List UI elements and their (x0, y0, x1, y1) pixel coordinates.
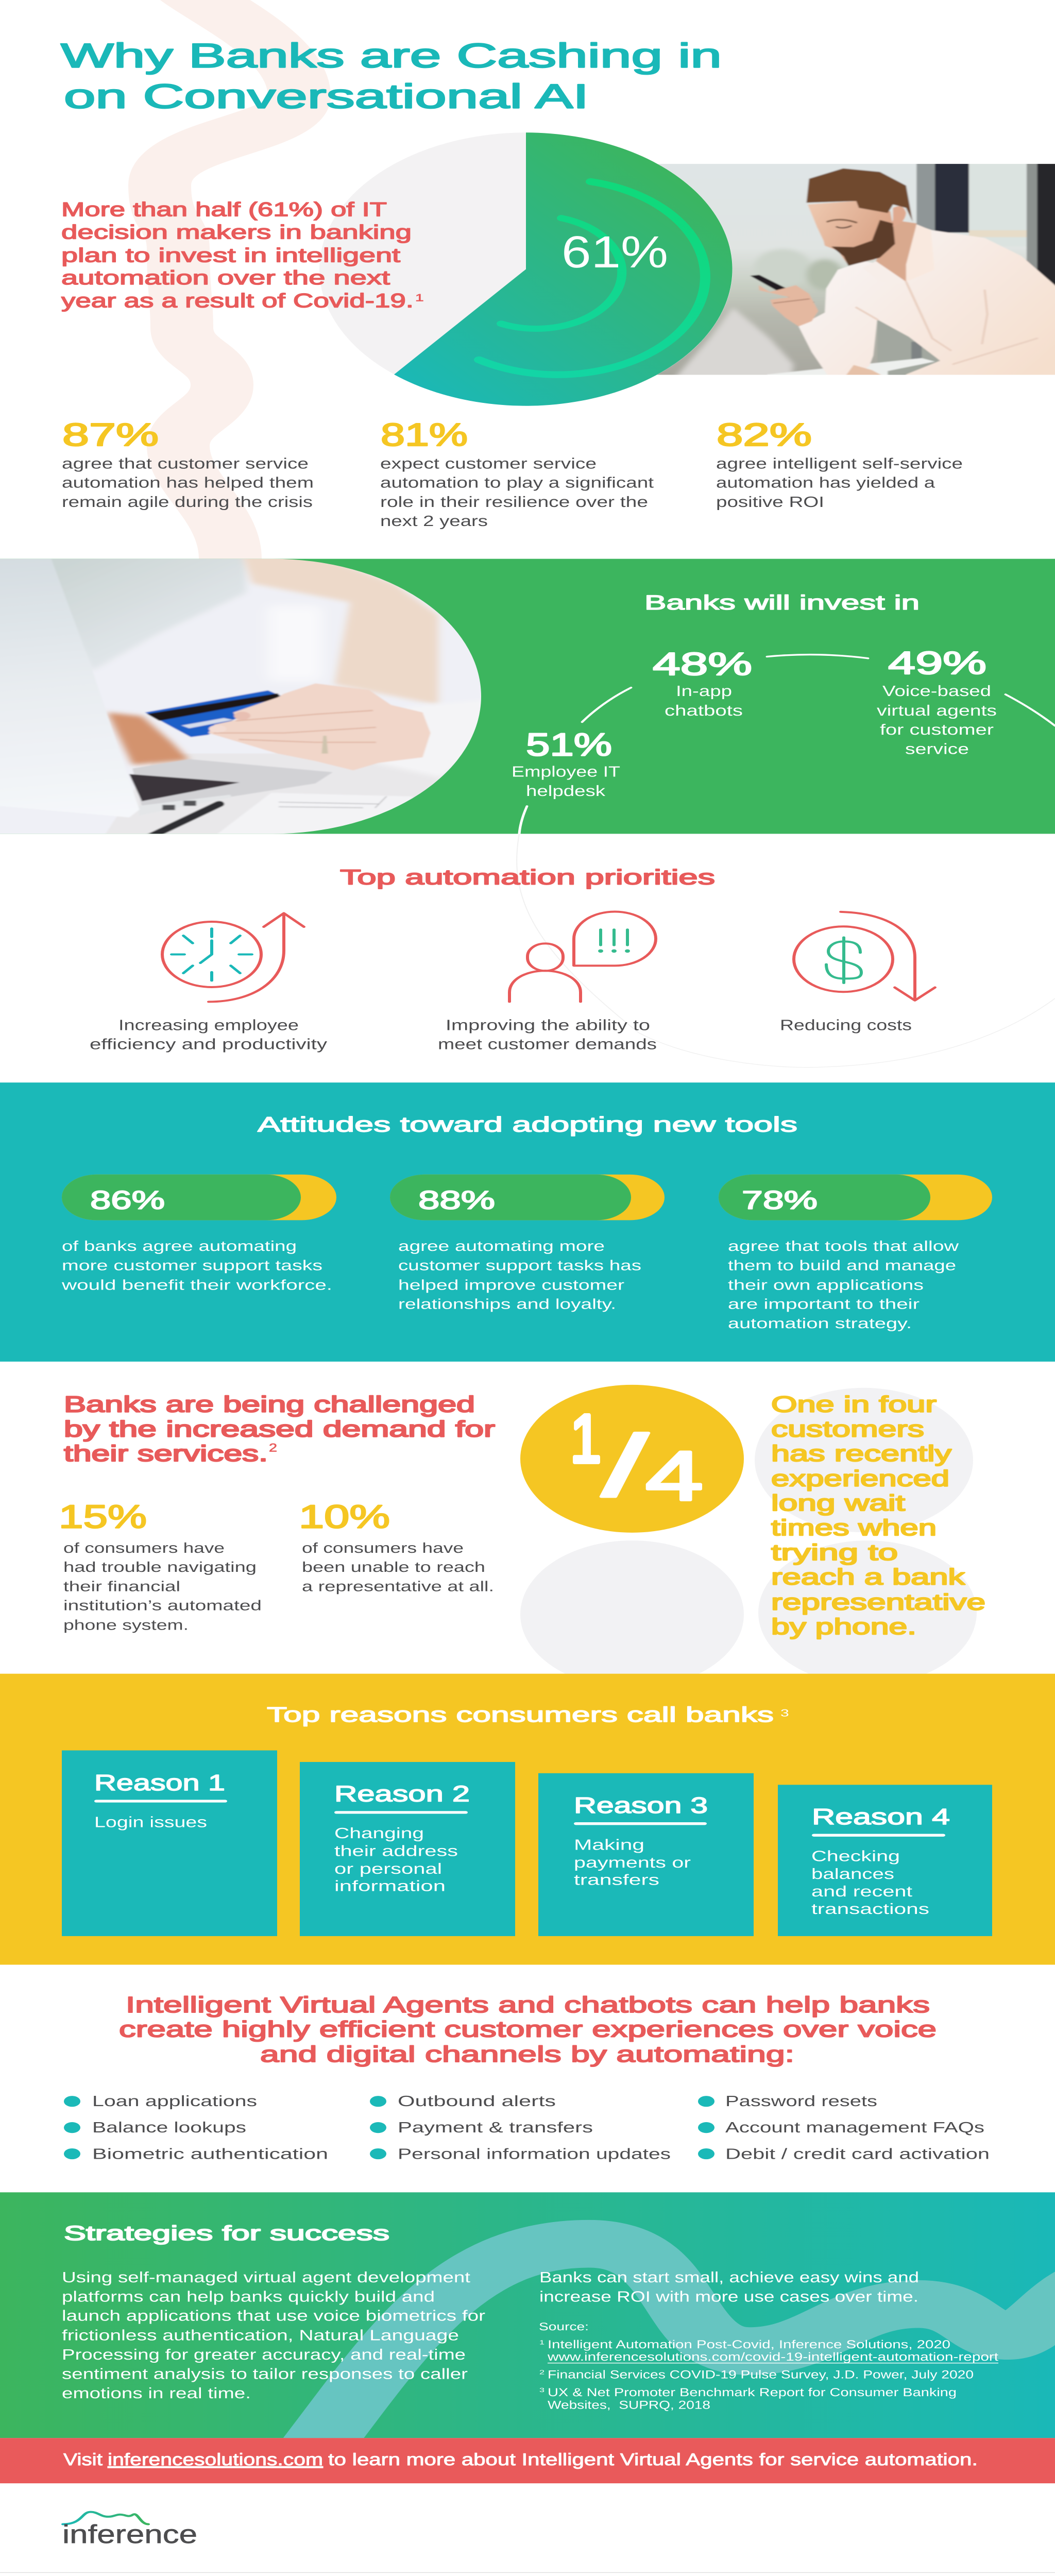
bullet list: column 1 (64, 2093, 328, 2162)
callout: more than half: 1 (415, 292, 424, 303)
stat: 81%: next 2 years (380, 513, 488, 530)
stat: 87%: remain agile during the crisis (62, 494, 313, 511)
sources list: 1 (539, 2339, 544, 2346)
stat: 81%: role in their resilience over the (380, 494, 648, 511)
heading: create highly efficient customer experiences over voice (119, 2016, 937, 2042)
text block: right paragraph (539, 2269, 919, 2305)
icon: person with speech bubble (509, 912, 656, 1002)
stat: 51% employee IT helpdesk (512, 726, 620, 800)
card: reason 3: payments or (574, 1854, 691, 1871)
footer rule (0, 2572, 1055, 2573)
caption: improving ability: meet customer demands (438, 1036, 657, 1053)
card: reason 1: Login issues (94, 1814, 207, 1831)
card: reason 3: Reason 3 (574, 1792, 708, 1818)
stat: 48% in-app chatbots: 48% (653, 646, 752, 682)
stat: 81% (380, 417, 654, 530)
sources list: Websites, SUPRQ, 2018 (548, 2398, 710, 2412)
text block: right paragraph: increase ROI with more use cases over time. (539, 2289, 918, 2305)
heading (64, 1392, 495, 1466)
photo: hand holding credit card at laptop (0, 558, 481, 834)
text: 78% description: their own applications (728, 1277, 924, 1293)
icon: clock with up arrow (162, 913, 304, 1002)
stat: 10%: a representative at all. (302, 1578, 494, 1595)
card: reason 3: Making (574, 1837, 644, 1853)
stat: 48% in-app chatbots (653, 646, 752, 719)
stat: 49% voice-based virtual agents: Voice-based (882, 683, 991, 700)
stat: 15%: institution’s automated (63, 1598, 262, 1614)
caption: increasing employee efficiency: efficiency and productivity (90, 1036, 327, 1053)
text: 78% description: are important to their (728, 1296, 920, 1312)
callout: one in four customers: by phone. (771, 1614, 916, 1639)
callout: more than half: automation over the next (61, 267, 390, 289)
callout: more than half: decision makers in banking (61, 221, 412, 243)
panel: banks are being challenged (59, 1385, 985, 1688)
stat: 15%: their financial (63, 1578, 180, 1595)
stat: 87%: 87% (62, 417, 159, 452)
card: reason 4: and recent (811, 1883, 912, 1900)
text: 78% description: agree that tools that allow (728, 1238, 959, 1254)
bullet list: column 3 (698, 2093, 990, 2162)
faint circle outline (517, 834, 1055, 1067)
green background (0, 559, 1055, 834)
heading (119, 1992, 937, 2066)
pill: 78%: 78% (742, 1186, 818, 1215)
stat: 82% (716, 417, 963, 511)
stat: 51% employee IT helpdesk: helpdesk (526, 783, 606, 800)
text block: left paragraph: emotions in real time. (62, 2385, 251, 2401)
callout: one in four customers: experienced (771, 1466, 949, 1491)
card: reason 3 (538, 1773, 754, 1936)
card: reason 4: Reason 4 (812, 1804, 950, 1829)
bullet list: column 1: Balance lookups (92, 2119, 246, 2136)
bullet list: column 2: Outbound alerts (398, 2093, 556, 2110)
text: 88% description: helped improve customer (398, 1277, 624, 1293)
callout: one in four customers: representative (771, 1589, 985, 1615)
text: 86% description (61, 1238, 332, 1293)
bullet list: column 3: Debit / credit card activation (725, 2146, 990, 2162)
card: reason 2: their address (334, 1843, 458, 1859)
stat: 15%: had trouble navigating (63, 1559, 257, 1575)
stat: 49% voice-based virtual agents: for customer (880, 721, 994, 738)
stat: 49% voice-based virtual agents (877, 645, 997, 757)
connector arcs (519, 655, 1055, 834)
stat: 87%: agree that customer service (62, 455, 309, 472)
donut chart: 61% (319, 132, 733, 406)
heading: their services. (64, 1440, 268, 1466)
sources list: Intelligent Automation Post-Covid, Inference Solutions, 2020 (548, 2338, 950, 2351)
sources list: Financial Services COVID-19 Pulse Survey, J.D. Power, July 2020 (548, 2368, 974, 2381)
callout: one in four customers: long wait (771, 1490, 905, 1515)
text block: left paragraph: launch applications that use voice biometrics for (62, 2308, 485, 2324)
card: reason 4: balances (811, 1866, 894, 1882)
panel: hero section (61, 0, 1055, 559)
card: reason 2: or personal (334, 1860, 442, 1877)
heading: Intelligent Virtual Agents and chatbots can help banks (126, 1992, 930, 2017)
caption: improving ability: Improving the ability to (446, 1017, 650, 1033)
bullet list: column 3: Password resets (725, 2093, 877, 2110)
stat: 87% (62, 417, 314, 511)
teal background (0, 1082, 1055, 1362)
text block: left paragraph (62, 2269, 485, 2401)
text: 78% description (728, 1238, 959, 1331)
heading: Banks will invest in (644, 591, 920, 614)
stat: 82%: agree intelligent self-service (716, 455, 963, 472)
card: reason 1 (62, 1750, 277, 1936)
caption: increasing employee efficiency: Increasing employee (118, 1017, 299, 1033)
text: 86% description: of banks agree automating (62, 1238, 297, 1254)
stat: 48% in-app chatbots: chatbots (665, 702, 743, 719)
stat: 49% voice-based virtual agents: virtual agents (877, 702, 997, 719)
pill: 86% (62, 1175, 336, 1220)
text block: left paragraph: platforms can help banks quickly build and (62, 2289, 435, 2305)
bullet list: column 2: Payment & transfers (398, 2119, 593, 2136)
panel: attitudes toward adopting new tools (0, 1082, 1055, 1362)
callout: more than half: More than half (61%) of IT (61, 198, 387, 221)
stat: 82%: 82% (717, 417, 812, 452)
stat: 15% (59, 1499, 262, 1633)
card: reason 2 (300, 1762, 515, 1936)
text: 88% description (398, 1238, 641, 1312)
stat: 10%: 10% (299, 1499, 390, 1535)
text block: left paragraph: sentiment analysis to tailor responses to caller (62, 2366, 468, 2382)
callout: one in four customers (771, 1392, 985, 1639)
icon: dollar coin with down arrow (794, 912, 935, 1001)
banner: visit inferencesolutions.com: Visit (63, 2450, 103, 2469)
logo: inference (62, 2512, 197, 2549)
caption: improving ability (438, 1017, 657, 1053)
heading: 3 (780, 1707, 789, 1719)
heading: Banks are being challenged (64, 1392, 475, 1417)
sources list: 2 (539, 2369, 544, 2376)
pale wave background (160, 0, 299, 559)
bullet list: column 2: Personal information updates (398, 2146, 671, 2162)
text: 88% description: relationships and loyalty. (398, 1296, 616, 1312)
stat: 10% (299, 1499, 494, 1595)
bullet list: column 1: Loan applications (92, 2093, 257, 2110)
bullet list: column 1: Biometric authentication (92, 2146, 328, 2162)
bullet list: column 2 (370, 2093, 671, 2162)
card: reason 2: Changing (334, 1825, 424, 1842)
callout: more than half: year as a result of Covid-19. (61, 290, 414, 312)
pill: 78% (719, 1175, 992, 1220)
stat: 15%: phone system. (63, 1617, 189, 1633)
stat: 15%: 15% (59, 1499, 147, 1535)
gradient background (0, 2192, 1055, 2438)
heading: Attitudes toward adopting new tools (258, 1113, 797, 1137)
stat: 82%: automation has yielded a (716, 474, 935, 491)
text: 86% description: more customer support tasks (62, 1257, 322, 1274)
callout: more than half (61, 198, 424, 312)
card: reason 2: information (334, 1878, 446, 1894)
heading: and digital channels by automating: (260, 2041, 794, 2066)
panel: intelligent virtual agents (64, 1992, 990, 2162)
panel: top reasons consumers call banks (0, 1674, 1055, 1964)
panel: strategies for success (0, 2192, 1055, 2464)
stat: 15%: of consumers have (63, 1540, 225, 1556)
callout: one in four customers: One in four (771, 1392, 937, 1417)
stat: 49% voice-based virtual agents: 49% (888, 645, 986, 681)
card: reason 4: transactions (811, 1901, 929, 1918)
callout: one in four customers: times when (771, 1515, 937, 1540)
logo: inference: inference (62, 2520, 197, 2549)
title: on Conversational AI (64, 77, 589, 115)
stat: 48% in-app chatbots: In-app (676, 683, 732, 700)
donut chart: 61%: 61% (561, 227, 668, 277)
panel: top automation priorities (90, 834, 1055, 1067)
stat: 51% employee IT helpdesk: 51% (526, 726, 612, 762)
stat: 49% voice-based virtual agents: service (905, 741, 969, 757)
callout: one in four customers: reach a bank (771, 1564, 965, 1589)
pill: 88% (390, 1175, 665, 1220)
heading: by the increased demand for (64, 1416, 495, 1442)
text block: right paragraph: Banks can start small, achieve easy wins and (539, 2269, 919, 2286)
stat: 10%: been unable to reach (302, 1559, 485, 1575)
banner: visit inferencesolutions.com (0, 2438, 1055, 2483)
sources list: 3 (539, 2386, 544, 2394)
decorative grey circles (520, 1388, 977, 1688)
one quarter badge: 4 (645, 1437, 703, 1515)
stat: 81%: 81% (381, 417, 468, 452)
callout: one in four customers: has recently (771, 1440, 951, 1466)
one quarter badge: / (602, 1417, 648, 1515)
one quarter badge: 1 (570, 1401, 601, 1477)
heading: Strategies for success (64, 2222, 389, 2244)
caption: increasing employee efficiency (90, 1017, 327, 1053)
callout: one in four customers: customers (771, 1416, 924, 1442)
stat: 51% employee IT helpdesk: Employee IT (512, 763, 620, 780)
sources list (539, 2320, 998, 2412)
card: reason 3: transfers (574, 1872, 659, 1888)
yellow background (0, 1674, 1055, 1964)
text: 88% description: agree automating more (398, 1238, 605, 1254)
sources list: UX & Net Promoter Benchmark Report for Consumer Banking (548, 2386, 957, 2399)
sources list: Source: (539, 2320, 589, 2333)
card: reason 1: Reason 1 (94, 1770, 225, 1795)
heading: 2 (269, 1442, 277, 1454)
pill: 86%: 86% (90, 1186, 165, 1215)
text: 86% description: would benefit their workforce. (61, 1277, 332, 1293)
text: 78% description: automation strategy. (728, 1315, 912, 1331)
pill: 88%: 88% (418, 1186, 495, 1215)
bullet list: column 3: Account management FAQs (725, 2119, 984, 2136)
stat: 10%: of consumers have (302, 1540, 464, 1556)
title: Why Banks are Cashing in (61, 37, 722, 75)
caption: reducing costs: Reducing costs (780, 1017, 912, 1033)
wave decoration (304, 2244, 1055, 2464)
stat: 87%: automation has helped them (62, 474, 314, 491)
card: reason 2: Reason 2 (334, 1781, 470, 1806)
banner: visit inferencesolutions.com: inferencesolutions.com (108, 2450, 323, 2469)
text block: left paragraph: Using self-managed virtual agent development (62, 2269, 470, 2286)
callout: more than half: plan to invest in intelligent (61, 244, 400, 266)
text: 88% description: customer support tasks has (398, 1257, 641, 1274)
one quarter badge (520, 1385, 744, 1533)
panel: banks will invest in (0, 558, 1055, 834)
text block: left paragraph: frictionless authentication, Natural Language (62, 2327, 459, 2344)
photo: man looking at phone (657, 164, 1055, 375)
stat: 81%: automation to play a significant (380, 474, 654, 491)
stat: 81%: expect customer service (380, 455, 597, 472)
text: 78% description: them to build and manage (728, 1257, 956, 1274)
heading: Top automation priorities (340, 866, 715, 889)
card: reason 4 (778, 1785, 992, 1936)
heading: Top reasons consumers call banks (267, 1703, 774, 1726)
card: reason 4: Checking (811, 1848, 900, 1865)
callout: one in four customers: trying to (771, 1539, 898, 1565)
text block: left paragraph: Processing for greater accuracy, and real-time (62, 2346, 466, 2363)
title (61, 37, 722, 115)
stat: 82%: positive ROI (716, 494, 824, 511)
sources list: www.inferencesolutions.com/covid-19-intelligent-automation-report (547, 2350, 998, 2363)
